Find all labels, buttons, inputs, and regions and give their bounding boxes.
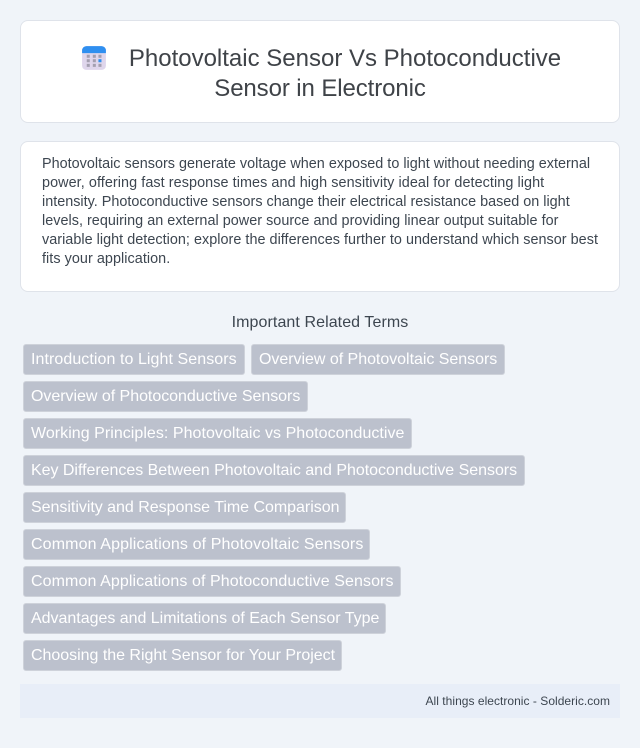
- tag: Choosing the Right Sensor for Your Project: [31, 647, 335, 664]
- footer: [20, 684, 620, 718]
- description text: power, offering fast response times and high sensitivity ideal for detecting light: [42, 175, 544, 191]
- tag: Introduction to Light Sensors: [31, 351, 237, 368]
- description text: Photovoltaic sensors generate voltage when exposed to light without needing external: [42, 156, 590, 172]
- tag: Advantages and Limitations of Each Sensor Type: [31, 610, 379, 627]
- tag: [23, 492, 346, 523]
- title: Sensor in Electronic: [214, 75, 426, 102]
- title: [129, 45, 561, 102]
- tag: [23, 344, 245, 375]
- tag: [23, 603, 386, 634]
- description text: intensity. Photoconductive sensors change their electrical resistance based on light: [42, 194, 570, 210]
- footer text: All things electronic - Solderic.com: [426, 694, 610, 708]
- panel: description card: [20, 141, 620, 292]
- tag: [23, 418, 412, 449]
- tag: Working Principles: Photovoltaic vs Photoconductive: [31, 425, 404, 442]
- tag: Overview of Photoconductive Sensors: [31, 388, 300, 405]
- tag: Overview of Photovoltaic Sensors: [259, 351, 497, 368]
- tag: [251, 344, 505, 375]
- description text: levels, requiring an external power source and providing linear output suitable for: [42, 213, 558, 229]
- tag: Sensitivity and Response Time Comparison: [31, 499, 339, 516]
- icon: calendar: [82, 46, 106, 70]
- description text: [42, 156, 598, 267]
- tag: [23, 640, 342, 671]
- panel: related terms tags: [23, 344, 525, 671]
- tag: [23, 566, 401, 597]
- description text: fits your application.: [42, 251, 170, 267]
- tag: [23, 381, 308, 412]
- heading: related terms: Important Related Terms: [232, 314, 408, 331]
- tag: Common Applications of Photoconductive Sensors: [31, 573, 394, 590]
- tag: [23, 529, 370, 560]
- tag: Key Differences Between Photovoltaic and Photoconductive Sensors: [31, 462, 517, 479]
- panel: title card: [20, 20, 620, 123]
- title: Photovoltaic Sensor Vs Photoconductive: [129, 45, 561, 72]
- tag: Common Applications of Photovoltaic Sensors: [31, 536, 363, 553]
- tag: [23, 455, 525, 486]
- description text: variable light detection; explore the differences further to understand which sensor best: [42, 232, 598, 248]
